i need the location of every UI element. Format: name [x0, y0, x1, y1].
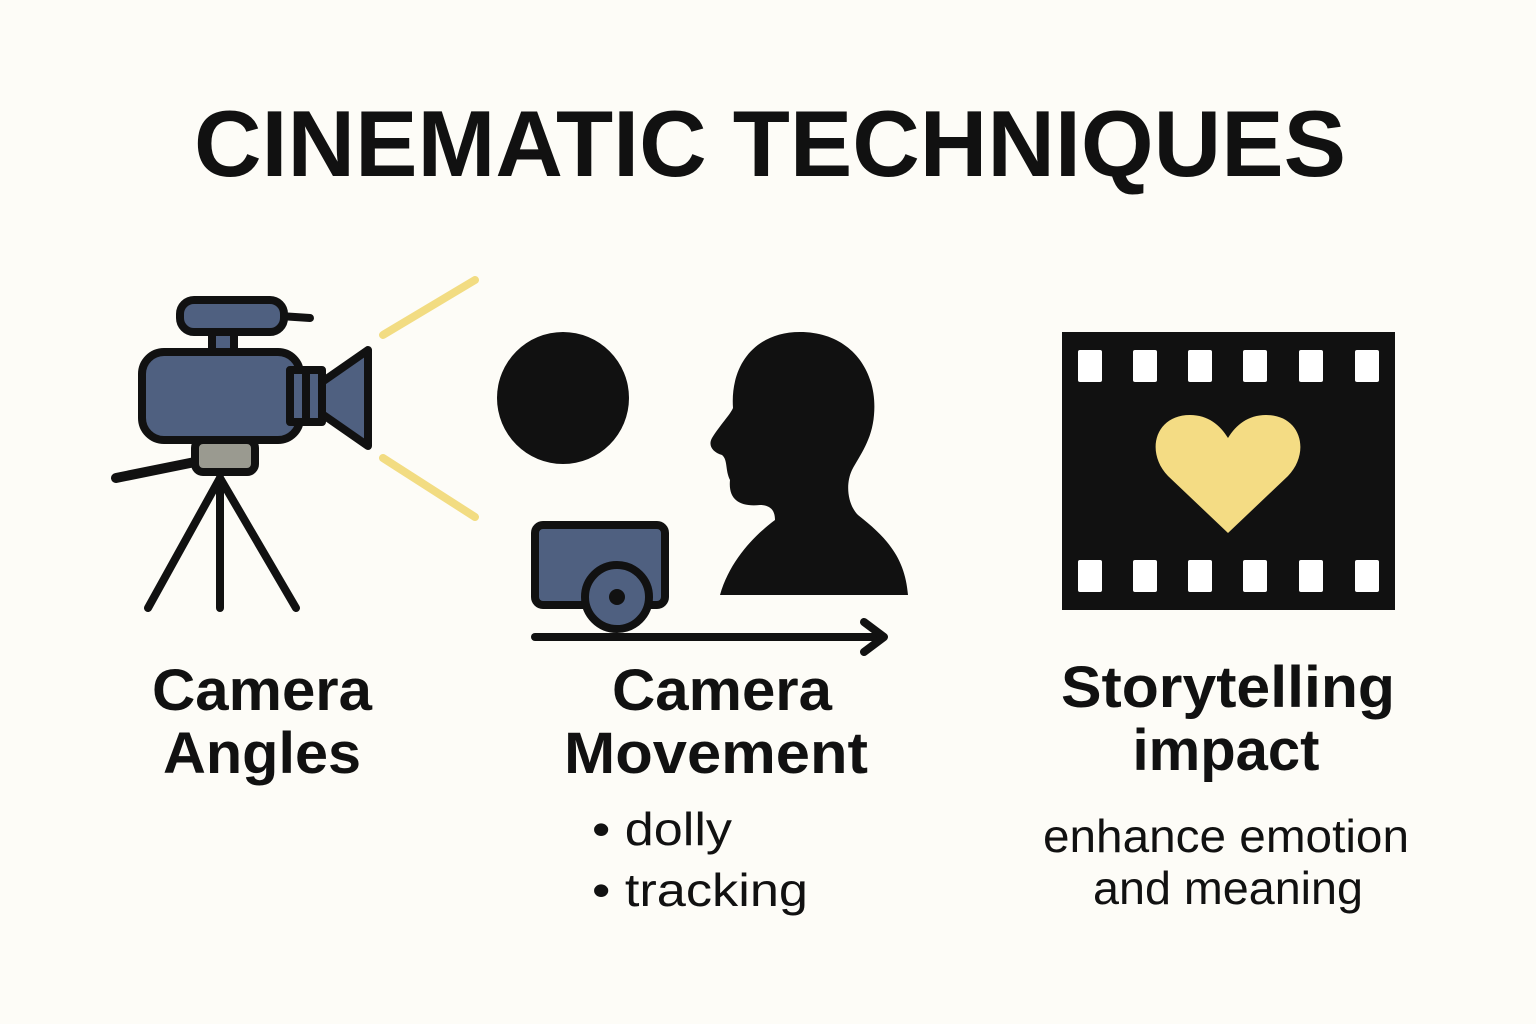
icon: dolly with arrow: [535, 525, 884, 652]
heading: camera movement: [564, 658, 868, 786]
heading: storytelling impact: Storytelling: [1061, 655, 1395, 720]
text: storytelling description: [1043, 810, 1409, 914]
icon: camera on tripod: [116, 300, 368, 608]
list: movement types: • tracking: [592, 864, 808, 916]
heading: camera angles: Camera: [152, 658, 373, 723]
text: storytelling description: and meaning: [1093, 862, 1363, 914]
icon: light beams: [383, 280, 475, 517]
heading: camera movement: Movement: [564, 721, 868, 786]
icon: film strip with heart: [1062, 332, 1395, 610]
list: movement types: • dolly: [592, 803, 732, 855]
heading: storytelling impact: impact: [1133, 718, 1319, 783]
icon: head silhouette: [710, 332, 908, 595]
icon: subject circle: [497, 332, 629, 464]
heading: storytelling impact: [1061, 655, 1395, 783]
heading: camera angles: [152, 658, 373, 786]
text: storytelling description: enhance emotion: [1043, 810, 1409, 862]
list: movement types: [592, 803, 808, 916]
title: CINEMATIC TECHNIQUES: [194, 91, 1346, 196]
heading: camera movement: Camera: [612, 658, 833, 723]
heading: camera angles: Angles: [163, 721, 361, 786]
